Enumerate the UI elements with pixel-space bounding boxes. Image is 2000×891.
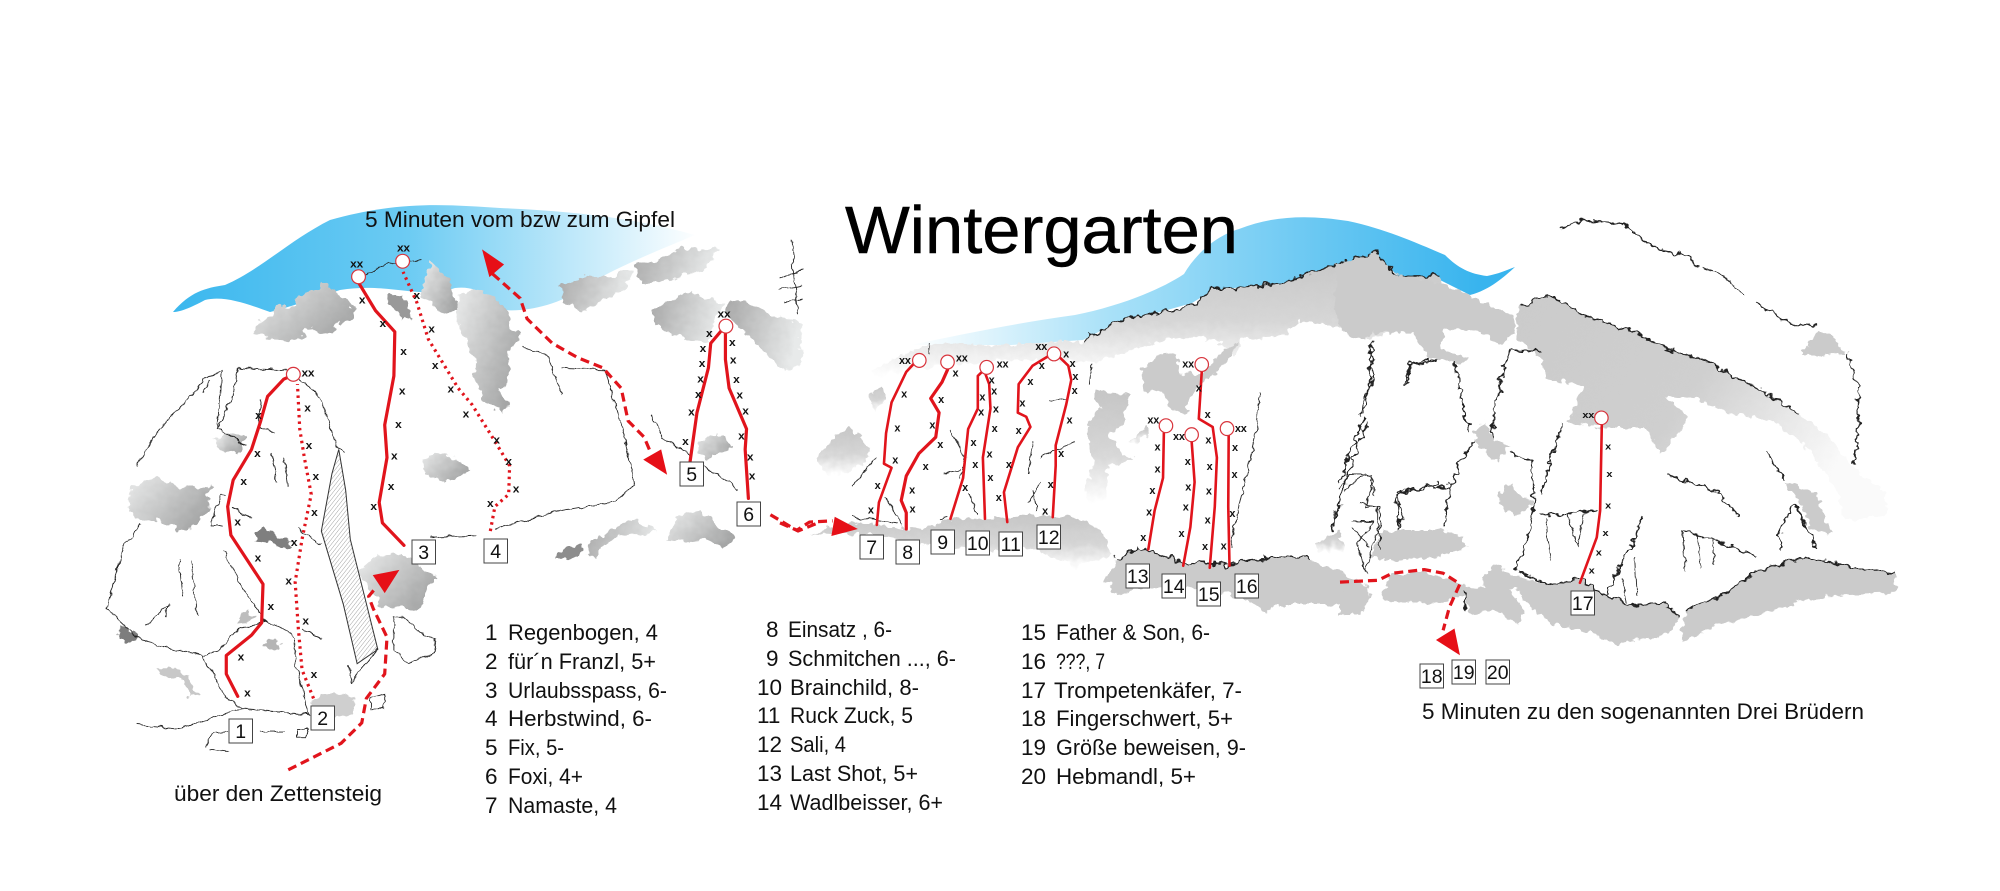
legend column 3: Größe beweisen, 9- [1056,735,1246,760]
arrow: towards Drei Brüder [1340,570,1460,655]
bolt marks: xxxxxxxx [285,403,320,681]
caption: Drei Brüder: 5 Minuten zu den sogenannten Drei Brüdern [1422,699,1864,724]
bolt marks: xxxxxxxx [729,338,756,482]
legend column 1: 3 [485,678,498,703]
legend column 2: Brainchild, 8- [790,675,919,700]
legend column 1: 6 [485,764,498,789]
legend column 2: 8 [766,617,779,642]
bolt marks: xxxxxxxxxxxx [962,374,1002,504]
bolt marks: xxxx [1221,442,1238,552]
route number boxes: 13 [1127,566,1149,588]
legend column 3: 17 [1021,678,1046,703]
bolt marks: xxxxx [1140,442,1161,544]
legend column 1: Fix, 5- [508,735,564,760]
anchors [913,347,1234,442]
legend column 2: 12 [757,732,782,757]
legend column 3: 15 [1021,620,1046,645]
legend column 2: Wadlbeisser, 6+ [790,790,943,815]
route number boxes: 19 [1453,662,1475,684]
legend column 3: ???, 7 [1056,649,1105,674]
bolt marks: xxxxx [868,389,907,516]
legend column 1: Regenbogen, 4 [508,620,658,645]
legend column 1: 7 [485,793,498,818]
anchor [1595,411,1608,425]
bolt marks [868,341,1247,553]
legend column 2: 10 [757,675,782,700]
route number boxes: 17 [1572,593,1594,615]
route number boxes: 8 [902,542,913,564]
title: Wintergarten [845,193,1238,268]
gray patches and ledges [809,341,1440,613]
legend column 3: 18 [1021,706,1046,731]
arrow: to and from the summit [482,249,667,475]
upper gray rock band [873,253,1440,376]
bolt marks: xxxxxxxxx [414,290,520,510]
bolt marks: xxxxxxxx [359,295,408,513]
bolt marks: xxxxxxx [682,329,713,448]
legend column 3 [1021,620,1246,789]
route number boxes: 18 [1421,666,1443,688]
bolt marks [234,243,756,699]
legend column 1: 5 [485,735,498,760]
gray vegetation patches [117,247,802,719]
route number boxes: 10 [967,533,989,555]
sky: right blue band [910,217,1515,345]
legend column 3: Father & Son, 6- [1056,620,1210,645]
bolt marks: xxxxxxxx [234,410,275,699]
hatched slab [321,449,378,664]
legend column 3: Fingerschwert, 5+ [1056,706,1233,731]
route number boxes: 5 [686,464,697,486]
legend column 3: 16 [1021,649,1046,674]
legend column 2: Last Shot, 5+ [790,761,918,786]
route number boxes: 12 [1038,527,1060,549]
legend column 1: Herbstwind, 6- [508,706,652,731]
climbing routes 7 to 16 [877,356,1230,568]
legend column 3: 19 [1021,735,1046,760]
legend column 1: 2 [485,649,498,674]
bolt marks: xxxx [1178,456,1191,540]
black ridge lines [1083,253,1440,566]
bolt marks: xxxxx [1006,360,1045,471]
arrow: to route 7 [780,517,858,536]
legend column 1: 1 [485,620,498,645]
route number boxes [229,462,1594,743]
route number boxes: 14 [1163,576,1185,598]
legend column 2: Sali, 4 [790,732,846,757]
anchors [286,254,733,381]
legend column 3: Trompetenkäfer, 7- [1054,678,1242,703]
route number boxes: 3 [418,542,429,564]
rock line drawing [852,343,1378,572]
route number boxes: 20 [1487,662,1509,684]
legend column 2: Ruck Zuck, 5 [790,703,913,728]
legend column 2 [757,617,956,815]
legend column 1: Namaste, 4 [508,793,617,818]
legend column 1 [485,620,667,818]
route number boxes: 4 [490,541,501,563]
route number boxes: 1 [235,721,246,743]
legend column 1: Foxi, 4+ [508,764,583,789]
legend column 1: 4 [485,706,498,731]
bolt marks: xxxxxxxx [301,243,731,380]
rock line drawing [1340,220,1896,618]
route number boxes: 9 [937,532,948,554]
route number boxes: 6 [743,504,754,526]
route number boxes: 2 [317,708,328,730]
rock illustration: right sector [1336,220,1896,655]
caption: Zettensteig: über den Zettensteig [174,781,382,806]
rock line drawing [107,241,803,751]
bolt marks: xxxxxxxxxxxxxxxx [899,341,1247,443]
fine rock lines [1340,268,1744,604]
legend column 2: 14 [757,790,782,815]
bolt marks: xxxxxxx [909,367,959,516]
legend column 2: 9 [766,646,779,671]
legend column 2: 11 [757,703,780,728]
legend column 1: für´n Franzl, 5+ [508,649,656,674]
rock illustration: central sector [780,253,1440,613]
bolt marks: xxxxxxxx [1582,411,1613,576]
route number boxes: 15 [1198,584,1220,606]
bolt marks: xxxxxxx [1196,383,1213,553]
legend column 2: Schmitchen ..., 6- [788,646,956,671]
route 17 [1580,425,1602,583]
gray rock masses [1336,254,1896,645]
sky: left blue band [173,205,695,312]
legend column 2: Einsatz , 6- [788,617,892,642]
legend column 3: Hebmandl, 5+ [1056,764,1196,789]
arrow: route 6 towards route 7 [770,515,820,531]
caption: summit approach: 5 Minuten vom bzw zum Gipfel [365,207,675,232]
legend column 1: Urlaubsspass, 6- [508,678,667,703]
rock illustration: left and centre sector [107,241,820,770]
route number boxes: 11 [1001,534,1021,556]
legend column 2: 13 [757,761,782,786]
climbing routes 1 to 6 [226,272,748,698]
route number boxes: 16 [1236,576,1258,598]
legend column 3: 20 [1021,764,1046,789]
bolt marks: xxxxxxxx [1042,349,1079,518]
approach arrow: über den Zettensteig [288,570,399,770]
route number boxes: 7 [866,537,877,559]
